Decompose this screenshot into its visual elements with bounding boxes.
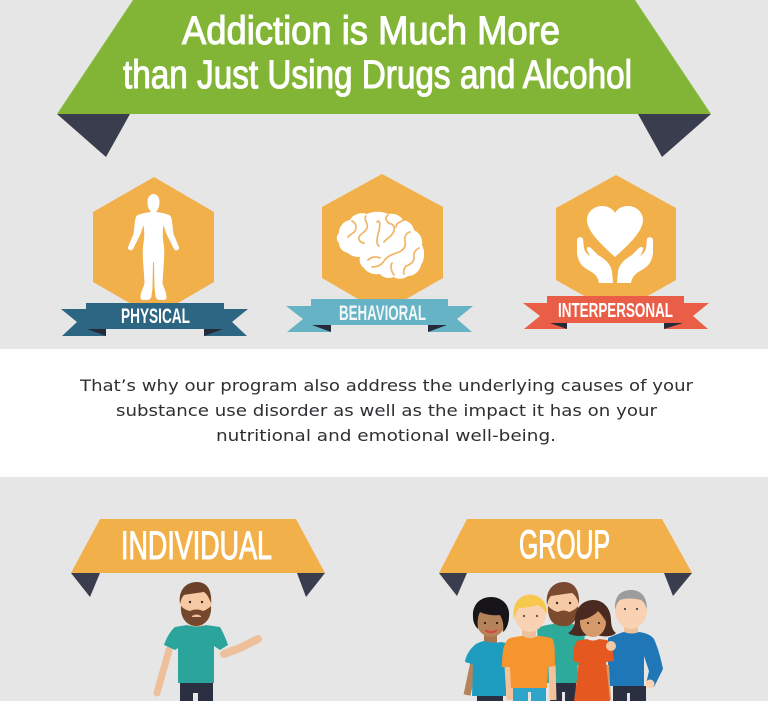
ribbon: physical: PHYSICAL — [121, 305, 190, 328]
banner: group: GROUP — [519, 523, 610, 567]
panel: program description — [0, 349, 768, 477]
person: bearded man — [537, 582, 585, 701]
person: blond man — [502, 594, 555, 701]
badge: physical — [61, 177, 248, 336]
illustration: group of people — [465, 582, 663, 701]
title banner — [57, 0, 711, 157]
description text: nutritional and emotional well-being. — [216, 426, 556, 445]
title text — [123, 9, 632, 97]
icon: hands holding heart — [577, 206, 653, 283]
ribbon: physical — [61, 303, 248, 336]
ribbon: interpersonal — [523, 296, 709, 329]
ribbon: behavioral: BEHAVIORAL — [339, 302, 426, 325]
person: woman in red dress — [568, 600, 616, 701]
icon: brain — [337, 212, 424, 279]
badge: interpersonal — [523, 175, 709, 329]
banner: individual — [71, 519, 325, 597]
description text — [79, 376, 693, 445]
description text: That’s why our program also address the underlying causes of your — [79, 376, 693, 395]
person: gray-haired man — [608, 590, 663, 701]
banner: individual: INDIVIDUAL — [121, 524, 272, 568]
title text: than Just Using Drugs and Alcohol — [123, 53, 632, 97]
ribbon: behavioral — [286, 299, 473, 332]
illustration: individual man — [157, 582, 258, 701]
banner: group — [439, 519, 692, 596]
description text: substance use disorder as well as the impact it has on your — [116, 401, 657, 420]
title text: Addiction is Much More — [182, 9, 560, 53]
icon: human body — [128, 194, 179, 300]
person: dark-haired woman — [465, 597, 509, 701]
hand on shoulder — [606, 641, 616, 651]
ribbon: interpersonal: INTERPERSONAL — [558, 300, 673, 322]
badge: behavioral — [286, 174, 473, 332]
